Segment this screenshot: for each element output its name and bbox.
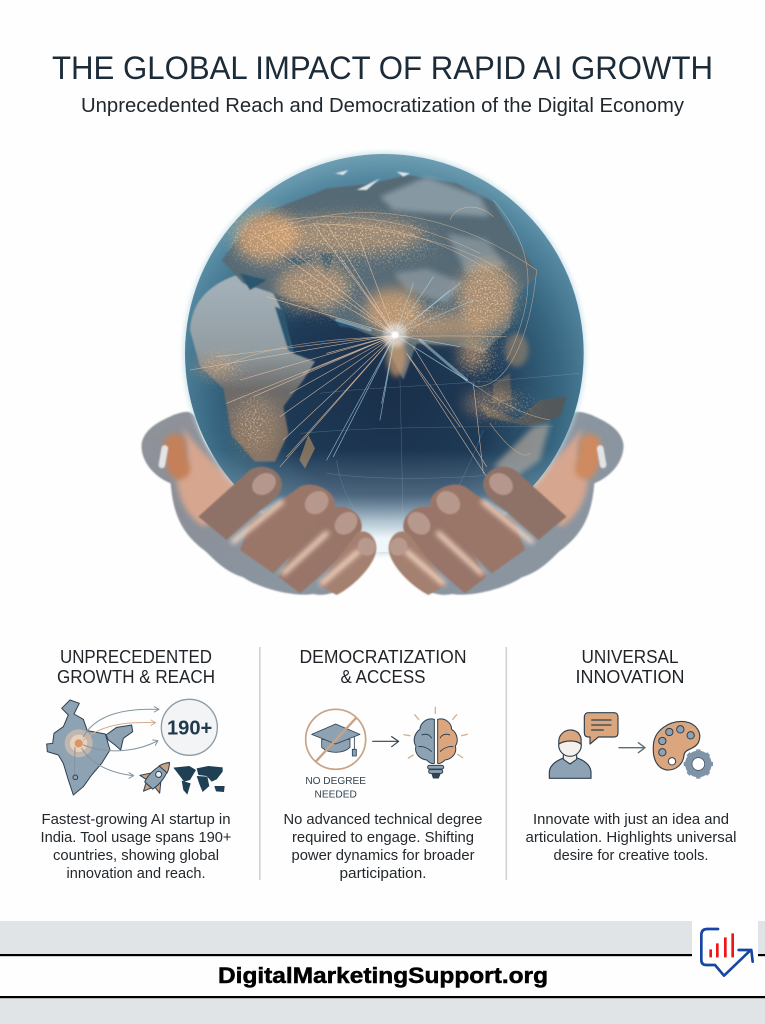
panel: universal innovation xyxy=(526,647,736,864)
icon: India map with arrows and 190+ badge xyxy=(47,699,225,800)
no degree label: NO DEGREE xyxy=(305,776,366,787)
footer website text: DigitalMarketingSupport.org xyxy=(218,963,548,988)
heading: INNOVATION xyxy=(576,667,684,687)
globe xyxy=(173,153,593,557)
land: Northern Asia pale cloud xyxy=(380,177,490,217)
description: No advanced technical degree xyxy=(284,812,483,828)
grid lines xyxy=(300,373,580,513)
icon: world map xyxy=(173,766,225,795)
globe held in hands illustration xyxy=(142,153,623,595)
description: Fastest-growing AI startup in xyxy=(42,812,231,828)
description: power dynamics for broader xyxy=(292,848,475,864)
icon: rocket xyxy=(134,754,179,800)
land: Indonesia and Australia xyxy=(480,373,567,427)
icon: gear xyxy=(684,749,713,779)
icon: prohibition sign xyxy=(306,709,366,769)
heading: GROWTH & REACH xyxy=(57,667,215,687)
Mediterranean and Red Sea xyxy=(240,253,373,353)
icon: speech bubble xyxy=(584,713,618,744)
city light speckle xyxy=(200,213,537,450)
description: participation. xyxy=(340,866,426,882)
land: Eurasia xyxy=(222,175,538,380)
heading: UNIVERSAL xyxy=(582,647,678,667)
description: desire for creative tools. xyxy=(554,848,708,864)
land: Africa xyxy=(190,275,315,462)
icon: footer logo xyxy=(701,929,753,976)
arrow xyxy=(619,743,645,753)
icon: palette xyxy=(653,721,700,770)
icon: location glow xyxy=(65,729,93,757)
icon: brain lightbulb xyxy=(414,719,457,778)
panel: unprecedented growth and reach xyxy=(40,647,231,882)
city light glow xyxy=(197,212,528,457)
right fingers xyxy=(386,467,567,595)
left fingers xyxy=(198,467,379,595)
icon: no degree needed to brain bulb xyxy=(305,707,467,800)
description: innovation and reach. xyxy=(66,866,206,882)
icon: bulb rays xyxy=(404,707,467,758)
panel: democratization and access xyxy=(284,647,483,882)
icon: graduation cap xyxy=(312,724,360,756)
hand backs xyxy=(142,412,623,595)
heading: UNPRECEDENTED xyxy=(60,647,212,667)
description: required to engage. Shifting xyxy=(292,830,474,846)
description: countries, showing global xyxy=(53,848,219,864)
arrow xyxy=(373,737,399,747)
subtitle: Unprecedented Reach and Democratization of the Digital Economy xyxy=(81,94,685,117)
connection rays from India xyxy=(190,200,550,477)
globe bottom fade xyxy=(216,457,552,553)
India light burst xyxy=(383,323,407,347)
land: Arctic ice xyxy=(335,170,410,190)
description: articulation. Highlights universal xyxy=(526,830,736,846)
icon: northeast India xyxy=(106,725,133,750)
heading: DEMOCRATIZATION xyxy=(300,647,466,667)
description: India. Tool usage spans 190+ xyxy=(40,830,231,846)
icon: person idea to palette xyxy=(549,713,713,779)
description: Innovate with just an idea and xyxy=(533,812,729,828)
arrows to destinations xyxy=(74,707,159,778)
icon: India map xyxy=(47,700,110,795)
land: Madagascar xyxy=(299,435,315,468)
heading: & ACCESS xyxy=(340,667,426,687)
footer band xyxy=(0,921,765,1024)
190+ badge: 190+ xyxy=(167,718,212,740)
190+ badge xyxy=(161,699,217,755)
icon: person xyxy=(549,730,591,778)
no degree label: NEEDED xyxy=(314,789,357,800)
title: THE GLOBAL IMPACT OF RAPID AI GROWTH xyxy=(52,50,713,86)
